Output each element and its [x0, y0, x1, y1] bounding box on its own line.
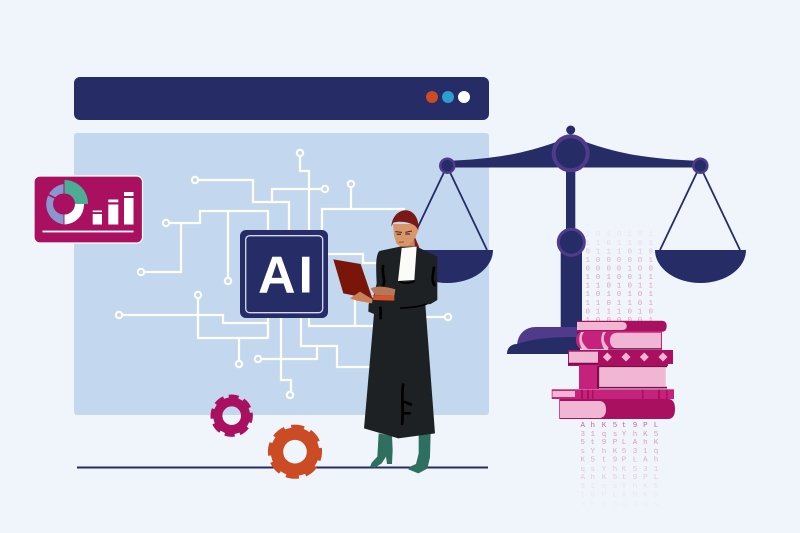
lawyer figure with laptop: [333, 210, 437, 473]
book 5: [552, 389, 674, 399]
book 2: [576, 331, 662, 350]
AI chip: AI: [258, 246, 316, 304]
stack of law books: [552, 321, 675, 419]
browser title bar: [74, 77, 489, 120]
code letters fading out: YhK531qs: [580, 501, 658, 509]
robe folds: [380, 265, 435, 425]
code letters fading out: 31qsYhK5: [580, 483, 659, 491]
laptop lid: [333, 259, 373, 299]
code letters fading out: 31qsYhK5: [580, 431, 659, 439]
boots: [370, 432, 431, 473]
code letters fading out: qsYhK531: [580, 466, 659, 474]
code letters fading out: t9PLAhK5: [580, 492, 659, 500]
binary digits column: 1101101: [586, 240, 654, 248]
code letters fading out: [580, 422, 659, 509]
binary digits column: 1010011: [586, 274, 654, 282]
binary digits column: 1010101: [586, 231, 654, 239]
binary digits column: 1010101: [586, 291, 654, 299]
upper hand: [371, 287, 395, 296]
white jabot: [398, 247, 417, 281]
robe: [364, 247, 437, 438]
binary digits column: 1101101: [586, 300, 654, 308]
code letters fading out: K5t9PLAh: [580, 456, 658, 464]
code letters fading out: AhK5t9PL: [580, 474, 659, 482]
book 3: [568, 350, 673, 366]
binary digits column: 0111010: [586, 308, 654, 316]
binary digits column: [586, 231, 654, 325]
AI chip: [240, 230, 328, 318]
lower hand: [350, 292, 373, 303]
neck and face: [393, 224, 419, 251]
scales of justice: [402, 126, 746, 354]
book 4: [579, 365, 667, 389]
binary digits column: 1101011: [586, 283, 654, 291]
ground line: [77, 466, 488, 468]
laptop base: [373, 295, 394, 301]
binary digits column: 1000001: [586, 257, 654, 265]
icon: magenta gear: [212, 396, 251, 435]
icon: orange gear: [270, 426, 320, 477]
book 6: [559, 399, 675, 419]
binary digits column: 1000001: [586, 317, 654, 325]
binary digits column: 0111010: [586, 248, 654, 256]
code letters fading out: AhK5t9PL: [580, 422, 659, 430]
hair: [391, 210, 418, 230]
panel: browser window body: [74, 133, 489, 415]
circuit traces: [116, 150, 451, 398]
hair tail: [414, 235, 419, 249]
book 1: [577, 321, 667, 332]
code letters fading out: sYhK531q: [580, 448, 658, 456]
code letters fading out: 5t9PLAhK: [580, 439, 659, 447]
binary digits column: 0000100: [586, 265, 654, 273]
dashboard card: [34, 176, 142, 243]
